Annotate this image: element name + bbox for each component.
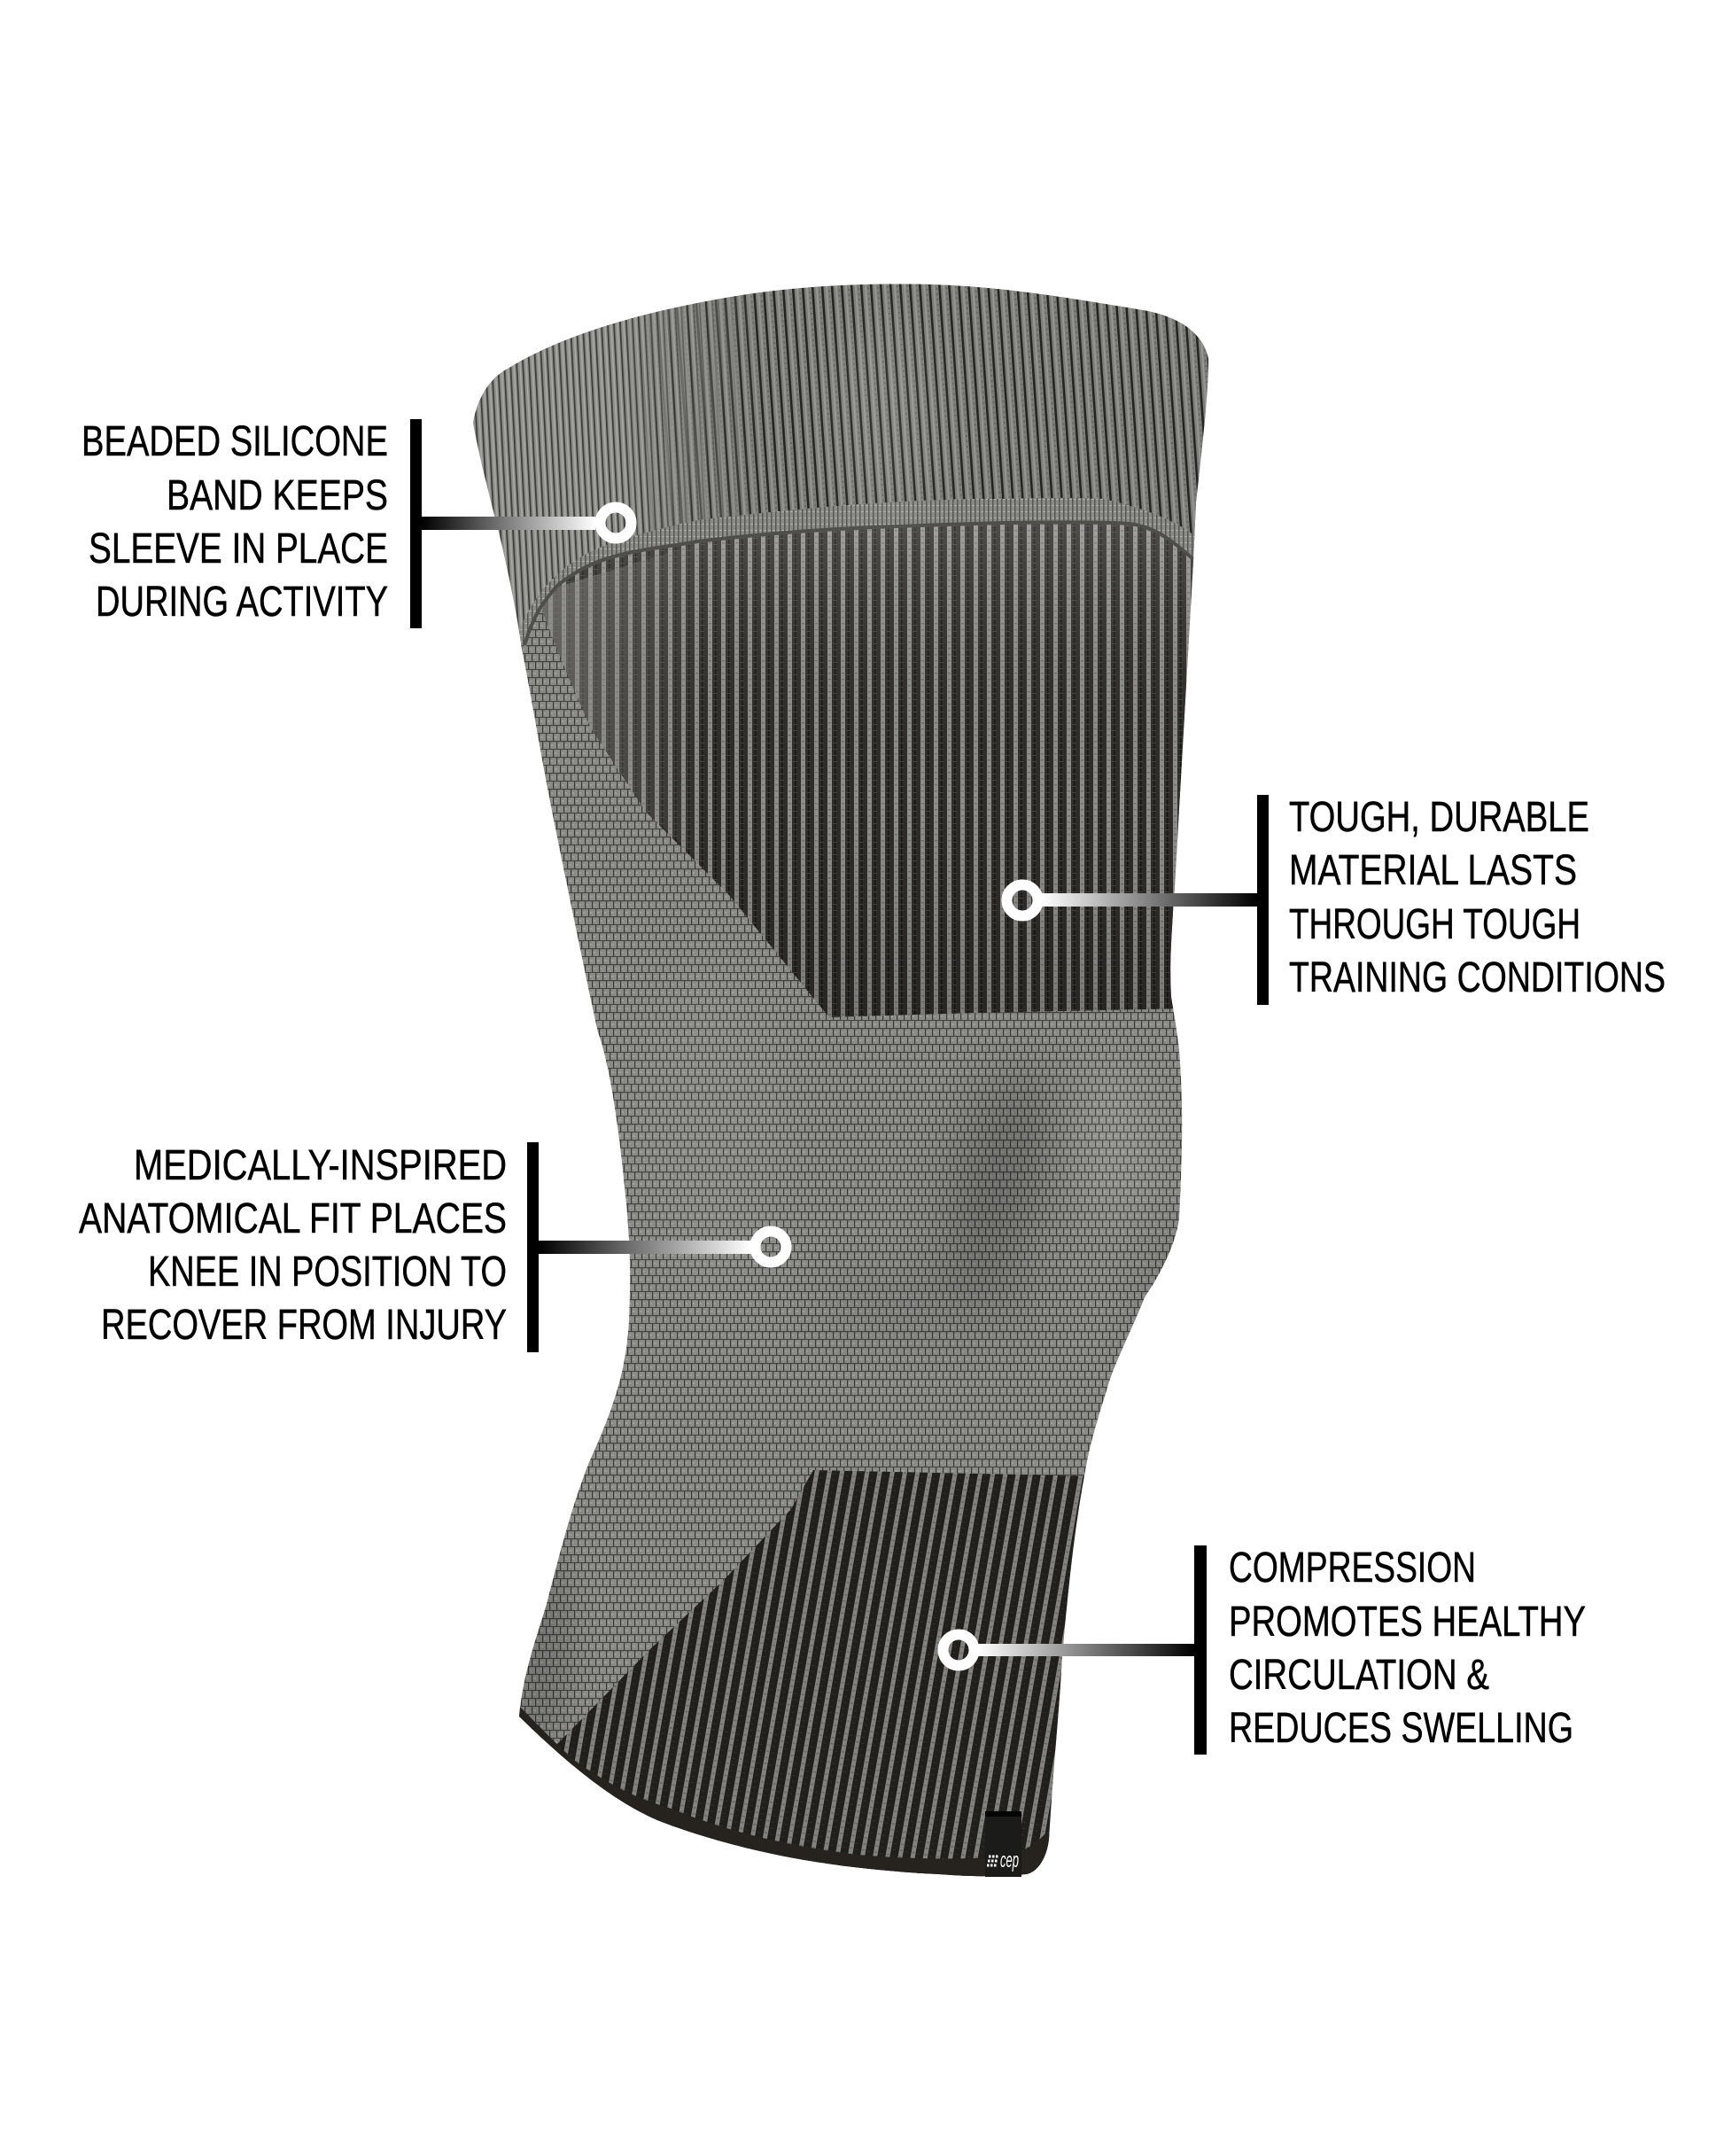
panel shading	[542, 524, 1196, 1017]
callout text: TOUGH, DURABLE	[1289, 794, 1589, 841]
knee sleeve product image	[461, 266, 1254, 1887]
callout text: REDUCES SWELLING	[1229, 1705, 1573, 1752]
callout text	[1289, 794, 1666, 1001]
callout bar	[1194, 1545, 1207, 1755]
marker ring	[755, 1232, 787, 1262]
callout text	[82, 418, 388, 626]
callout: tough durable material	[1006, 794, 1666, 1005]
callout text: THROUGH TOUGH	[1289, 901, 1580, 948]
callout text: CIRCULATION &	[1229, 1652, 1489, 1699]
seam dark line	[524, 522, 1196, 645]
callout text: COMPRESSION	[1229, 1545, 1476, 1592]
marker ring	[1006, 884, 1038, 916]
callout text: SLEEVE IN PLACE	[89, 525, 388, 572]
callout text: PROMOTES HEALTHY	[1229, 1599, 1586, 1646]
calf dark compression panel	[551, 1470, 1099, 1887]
marker ring	[943, 1634, 975, 1666]
marker ring	[601, 507, 631, 539]
callout bar	[1257, 795, 1269, 1005]
callout text: MEDICALLY-INSPIRED	[134, 1142, 507, 1189]
bottom hem	[519, 1707, 1049, 1877]
connector line	[539, 1241, 751, 1254]
callout: compression	[943, 1545, 1586, 1755]
callout bar	[527, 1142, 539, 1352]
callout text	[79, 1142, 507, 1349]
thigh dark compression panel	[542, 524, 1196, 1017]
silicone seam strip	[516, 498, 1198, 647]
callout text: BEADED SILICONE	[82, 418, 388, 465]
connector line	[978, 1644, 1194, 1656]
callout text: KNEE IN POSITION TO	[148, 1249, 507, 1296]
callout text: MATERIAL LASTS	[1289, 847, 1577, 894]
band left fine-rib zone	[473, 294, 752, 634]
connector line	[422, 517, 595, 530]
knee shadow and highlights	[509, 310, 1254, 1746]
mid knit fabric around the knee	[461, 266, 1223, 1887]
logo wordmark: cep	[1000, 1849, 1019, 1872]
callout text: BAND KEEPS	[167, 472, 388, 519]
callout bar	[410, 419, 422, 628]
connector line	[1042, 893, 1257, 907]
callout: anatomical fit	[79, 1142, 787, 1352]
sewn label with logo	[985, 1811, 1021, 1877]
ribbed top band	[461, 266, 1223, 638]
logo dots	[987, 1856, 999, 1865]
callout: beaded silicone band	[82, 418, 631, 628]
callout text: RECOVER FROM INJURY	[101, 1302, 507, 1349]
panel left fade	[542, 551, 689, 851]
callout text: ANATOMICAL FIT PLACES	[79, 1195, 507, 1242]
callout text: DURING ACTIVITY	[96, 579, 388, 626]
callout text	[1229, 1545, 1586, 1752]
